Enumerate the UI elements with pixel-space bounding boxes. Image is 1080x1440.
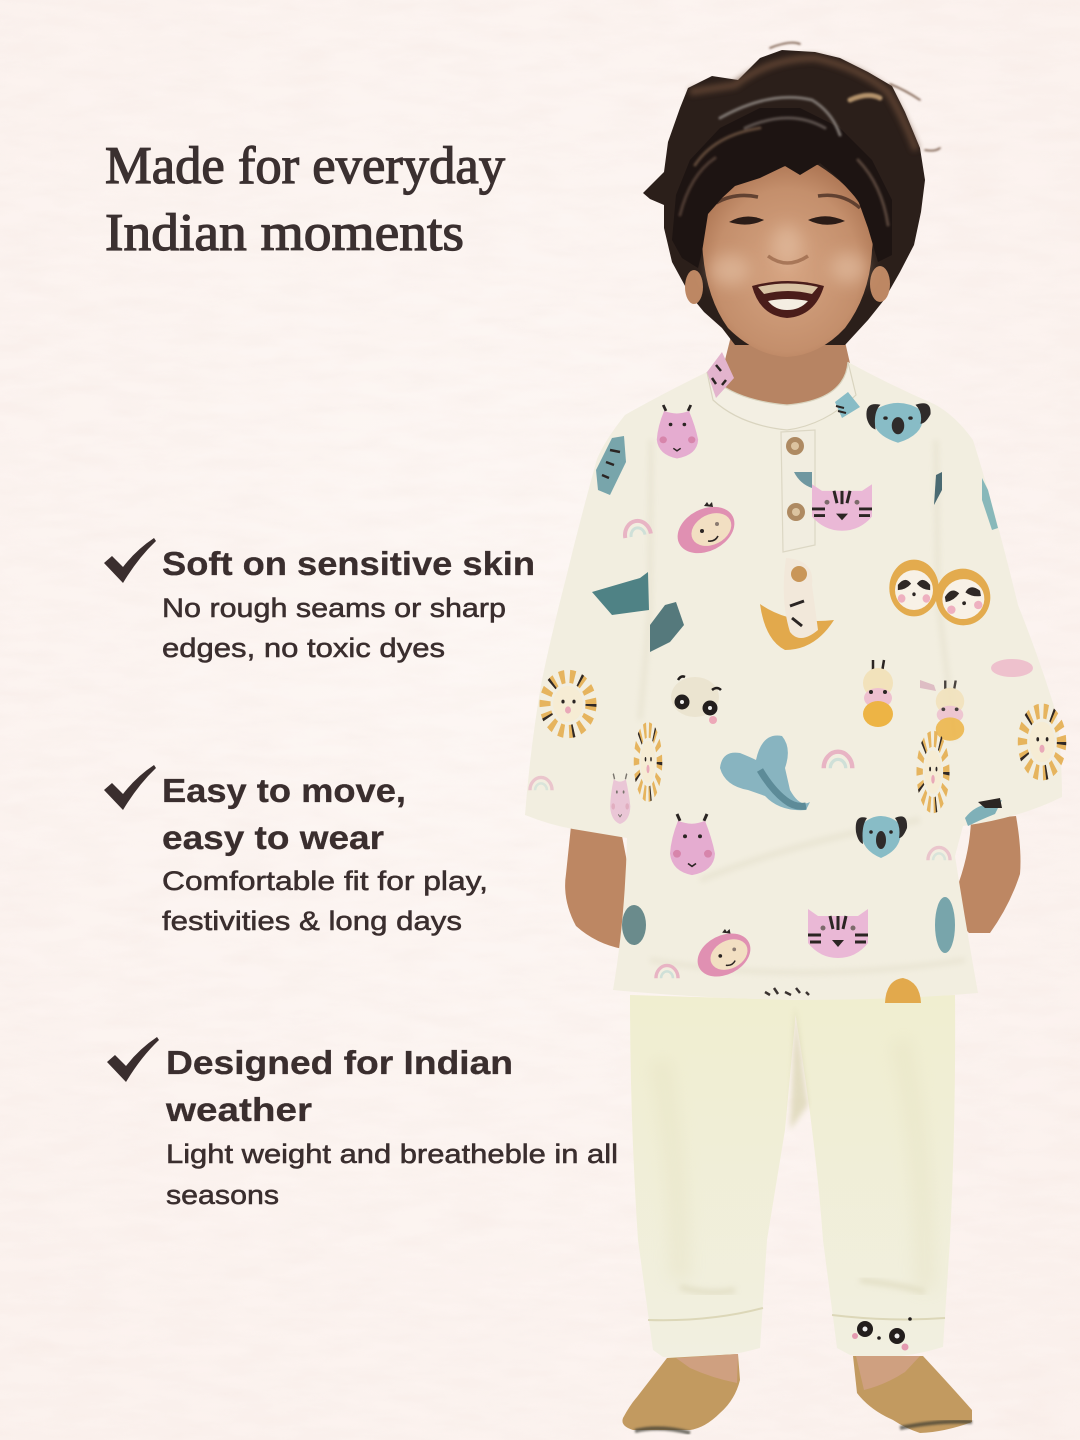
cheeks <box>710 225 866 286</box>
shoes <box>622 1354 972 1433</box>
icon: check mark <box>104 538 156 583</box>
eyes <box>729 216 845 225</box>
body: soft on skin: edges, no toxic dyes <box>162 633 445 663</box>
body: soft on skin: No rough seams or sharp <box>162 593 506 623</box>
hair strands <box>680 43 940 225</box>
hair brown tips <box>690 58 916 150</box>
title: Made for everyday <box>105 137 505 195</box>
benefit: soft on sensitive skin <box>104 538 535 663</box>
hair back <box>643 50 925 345</box>
face <box>702 164 873 357</box>
title: Indian moments <box>105 204 464 262</box>
nose <box>768 256 808 263</box>
kurta body <box>525 362 1062 1000</box>
panda print on cuff <box>852 1317 912 1350</box>
body: easy to move <box>162 866 488 936</box>
kurta fabric folds <box>640 440 965 972</box>
heading: indian weather: Designed for Indian <box>166 1044 513 1081</box>
pants <box>630 995 955 1358</box>
smile <box>752 281 824 318</box>
kurta and neck <box>525 320 1062 1000</box>
icon: check mark <box>107 1037 159 1082</box>
body: indian weather <box>166 1139 618 1210</box>
heading: indian weather <box>165 1044 513 1128</box>
body: indian weather: seasons <box>166 1180 279 1210</box>
benefit: easy to move <box>104 765 488 936</box>
hands <box>565 816 1020 949</box>
body: easy to move: festivities & long days <box>162 906 462 936</box>
ears <box>685 266 890 304</box>
benefit: designed for indian weather <box>107 1037 618 1210</box>
body: indian weather: Light weight and breatheble in all <box>166 1139 618 1169</box>
heading: indian weather: weather <box>165 1091 312 1128</box>
icon: check mark <box>104 765 156 810</box>
title <box>105 137 505 262</box>
body: soft on skin <box>162 593 506 663</box>
photo: smiling child in printed kurta <box>525 43 1062 1433</box>
neck <box>722 320 852 405</box>
kurta animal prints <box>530 392 1062 1003</box>
eyebrows <box>716 195 860 208</box>
body: easy to move: Comfortable fit for play, <box>162 866 488 896</box>
kurta collar and placket <box>707 352 856 552</box>
hair fringe <box>672 108 892 268</box>
heading: easy to move: Easy to move, <box>162 772 406 809</box>
heading: easy to move <box>162 772 406 856</box>
heading: soft on skin: Soft on sensitive skin <box>162 545 535 582</box>
heading: easy to move: easy to wear <box>162 819 384 856</box>
